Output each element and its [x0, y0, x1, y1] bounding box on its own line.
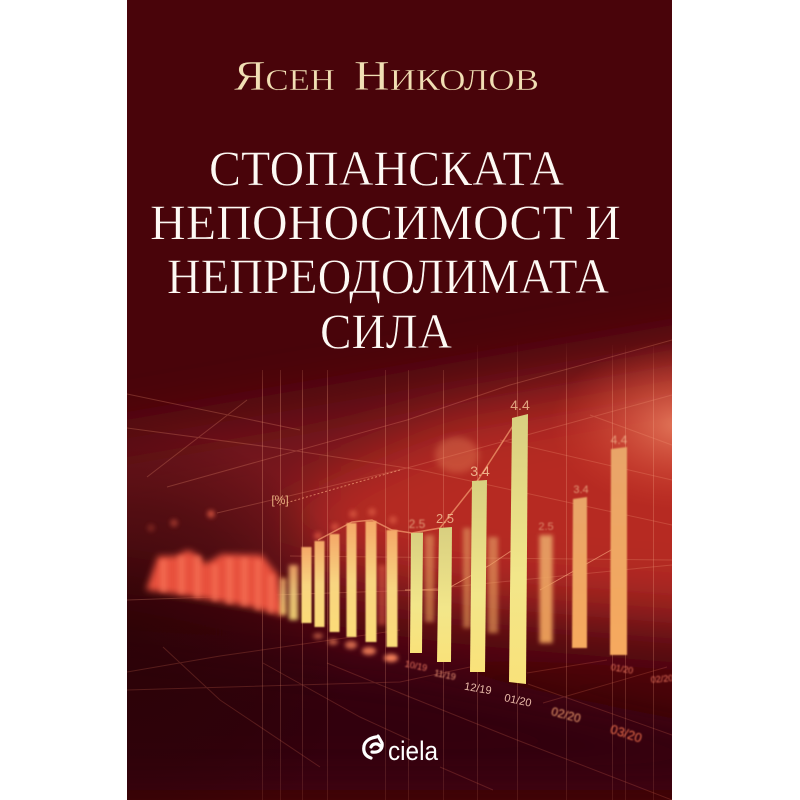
author name: ЯСЕН [234, 54, 335, 100]
background blurred bars [378, 528, 552, 643]
publisher logo [362, 734, 438, 760]
cover background [127, 0, 672, 800]
bar value labels: 3.4 [470, 463, 490, 479]
trend line over near bars [318, 418, 518, 540]
book cover illustration [127, 0, 672, 800]
date axis labels: 12/19 [463, 681, 492, 697]
author name [234, 62, 538, 90]
bar value labels: 2.5 [409, 517, 426, 531]
date axis labels: 10/19 [404, 659, 428, 673]
book title [151, 152, 620, 349]
right pale bars [572, 447, 627, 655]
icon: ciela mark [364, 736, 382, 758]
date axis labels: 03/20 [608, 721, 644, 746]
logo wordmark: ciela [388, 736, 439, 766]
blurred dots [147, 508, 397, 540]
bar value labels: 4.4 [611, 433, 628, 447]
book title: СТОПАНСКАТА [209, 140, 564, 196]
book title: НЕПРЕОДОЛИМАТА [167, 248, 609, 304]
book title: СИЛА [320, 303, 452, 359]
bar value labels: 2.5 [538, 521, 554, 533]
bar value labels [409, 397, 628, 533]
front yellow bars [410, 414, 528, 684]
date axis labels: 01/20 [610, 662, 634, 676]
date axis labels: 11/19 [433, 668, 457, 682]
date axis labels: 01/20 [503, 692, 533, 710]
date axis labels [404, 659, 674, 746]
perspective grid lines [127, 340, 672, 800]
glow cloud behind the bars [435, 437, 479, 473]
mid bars [280, 521, 398, 647]
book title: НЕПОНОСИМОСТ И [150, 194, 621, 250]
blurred far bars mass [146, 550, 284, 616]
author name: НИКОЛОВ [354, 54, 539, 100]
bar value labels: 2.5 [436, 511, 454, 526]
date axis labels: 02/20 [650, 673, 674, 685]
percent axis label: [%] [271, 493, 289, 507]
bar value labels: 3.4 [573, 484, 589, 496]
bar value labels: 4.4 [510, 397, 530, 413]
date axis labels: 02/20 [550, 704, 583, 726]
bar reflections [313, 633, 398, 662]
